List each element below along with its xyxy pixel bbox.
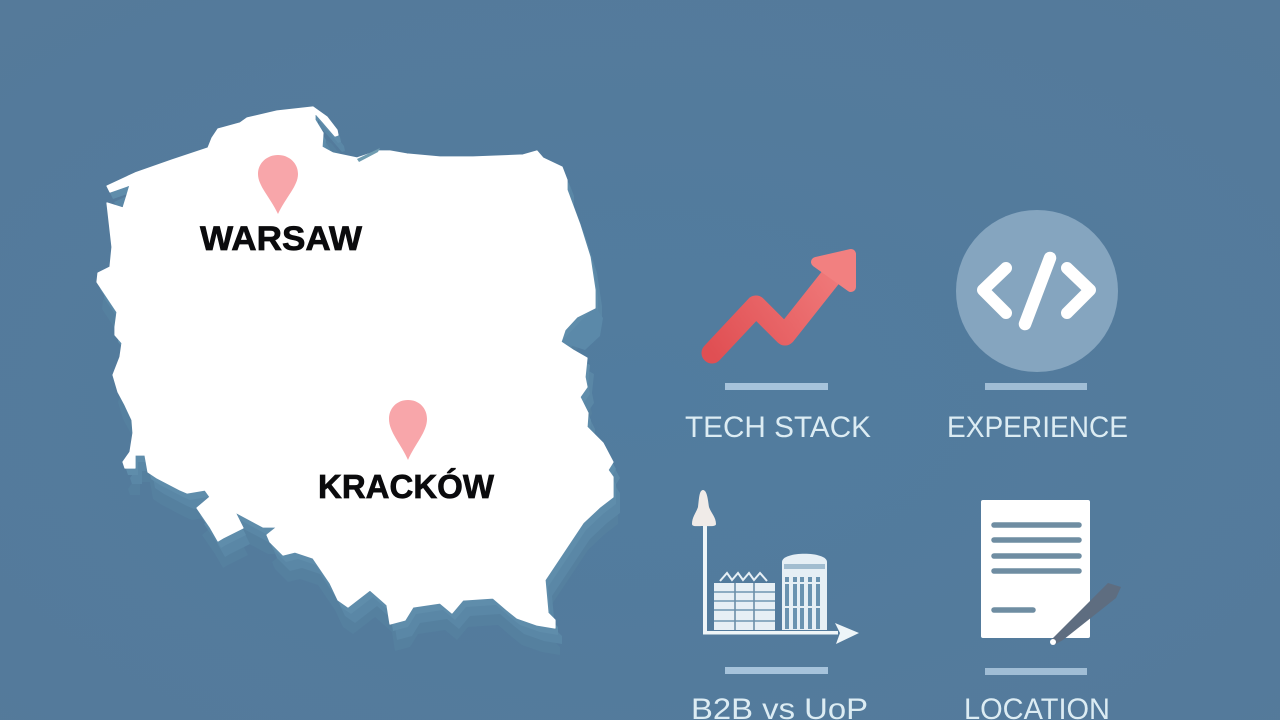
axes: [692, 490, 859, 644]
map of Poland: [97, 107, 620, 655]
label: tech stack: TECH STACK: [685, 411, 871, 444]
item: location: [964, 500, 1121, 720]
map silhouette: [97, 107, 613, 628]
pin: Kraków: [389, 400, 427, 460]
item: tech stack: [685, 254, 871, 444]
divider bar: [985, 668, 1087, 675]
label: experience: EXPERIENCE: [947, 411, 1128, 444]
item: B2B vs UoP: [691, 490, 868, 720]
map depth shadow: [100, 114, 620, 655]
label: Warsaw: WARSAW: [200, 220, 363, 258]
item: experience: [947, 210, 1128, 444]
low building: [714, 573, 775, 630]
icon: rising red arrow: [712, 254, 851, 353]
icon: chart with buildings: [692, 490, 859, 644]
pin: Warsaw: [258, 155, 298, 214]
divider bar: [725, 383, 828, 390]
tall building: [782, 554, 827, 630]
icon: code circle: [956, 210, 1118, 372]
icon: document with pencil: [981, 500, 1121, 645]
label: Kraków: KRACKÓW: [318, 468, 495, 505]
divider bar: [985, 383, 1087, 390]
divider bar: [725, 667, 828, 674]
coastal sliver: [357, 148, 380, 162]
